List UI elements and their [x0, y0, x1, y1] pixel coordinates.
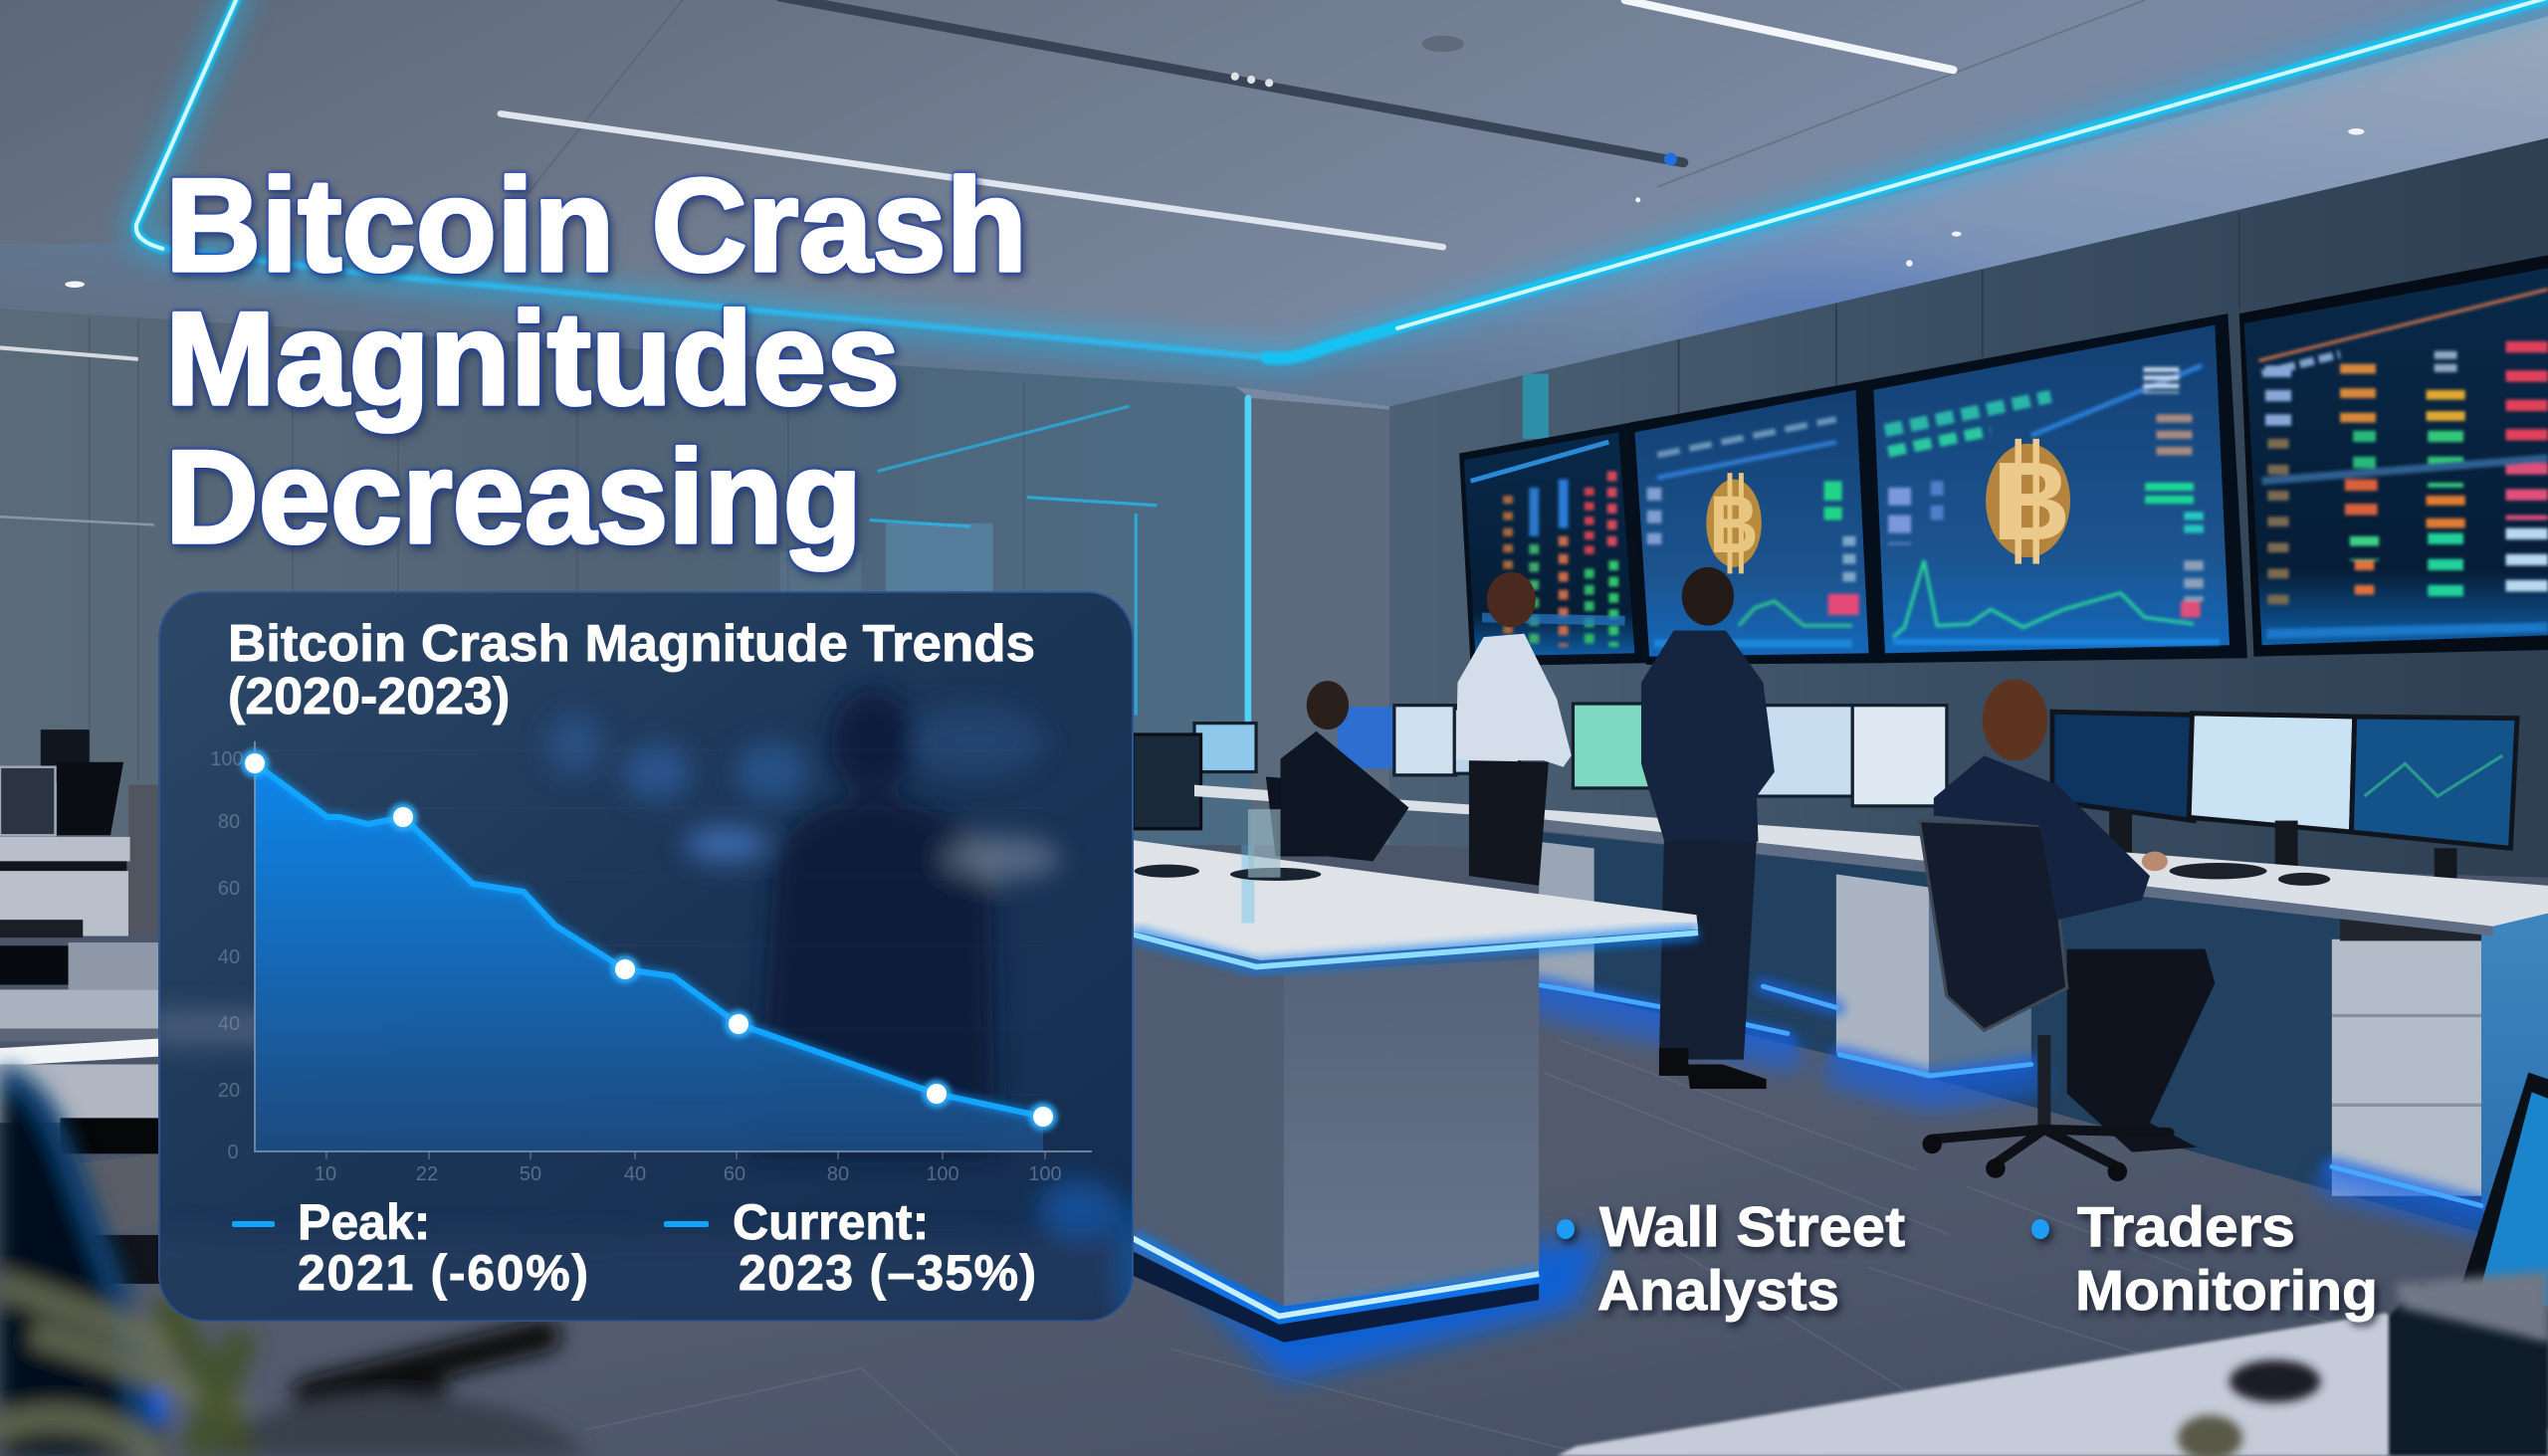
x axis labels: 50 — [520, 1163, 541, 1185]
ceiling light strips — [501, 0, 1953, 247]
left desks — [0, 729, 164, 1284]
panel: chart card — [129, 592, 1224, 1353]
y axis labels: 40 — [218, 946, 240, 968]
label: traders monitoring: Traders — [2077, 1195, 2295, 1259]
screen 1 — [1459, 423, 1646, 666]
data points — [241, 749, 1057, 1131]
area under line — [255, 763, 1043, 1151]
legend: peak — [232, 1194, 588, 1301]
x axis labels: 80 — [827, 1163, 849, 1185]
gridlines — [254, 750, 1045, 1095]
legend: current: Current: — [733, 1194, 929, 1250]
x axis labels: 60 — [724, 1163, 745, 1185]
trend line — [255, 763, 1043, 1117]
back desk row — [1133, 704, 2548, 1251]
bitcoin logo right: B — [1993, 439, 2070, 563]
y axis labels: 60 — [218, 878, 240, 900]
y axis labels: 80 — [218, 811, 240, 833]
legend: peak: 2021 (-60%) — [298, 1245, 588, 1301]
panel title — [228, 615, 1035, 726]
label: wall street analysts: Analysts — [1597, 1259, 1839, 1323]
axes — [255, 741, 1092, 1151]
panel title: (2020-2023) — [228, 668, 510, 726]
line chart — [210, 741, 1092, 1185]
glass wall left — [0, 309, 1251, 845]
title: Bitcoin Crash — [165, 152, 1027, 300]
x axis labels: 22 — [416, 1163, 438, 1185]
foreground right desk and monitors — [1557, 1073, 2548, 1456]
y axis labels — [210, 748, 244, 1163]
screen 3 — [1867, 313, 2247, 663]
right wall — [1251, 138, 2548, 878]
under-desk cabinets — [1539, 832, 2548, 1251]
label: traders monitoring: Monitoring — [2075, 1259, 2378, 1323]
legend: current — [664, 1194, 1036, 1301]
foreground left chair and plant — [0, 1073, 588, 1456]
monitors row — [1133, 704, 2517, 894]
y axis labels: 100 — [210, 748, 244, 770]
y axis labels: 20 — [218, 1080, 240, 1102]
overlay: title, panel, labels — [158, 169, 2383, 1332]
label: wall street analysts — [1557, 1195, 1905, 1323]
floor — [0, 975, 2548, 1456]
x axis labels: 40 — [624, 1163, 646, 1185]
neon ceiling line — [136, 0, 2548, 725]
title: Decreasing — [165, 424, 862, 571]
screen 4 — [2239, 255, 2548, 657]
y axis labels: 0 — [227, 1142, 239, 1163]
island floor glow — [1105, 1194, 1608, 1381]
title — [165, 152, 1027, 571]
x axis labels: 100 — [1028, 1163, 1062, 1185]
panel title: Bitcoin Crash Magnitude Trends — [228, 615, 1035, 673]
ceiling — [0, 0, 2548, 423]
screen 2 — [1630, 380, 1885, 665]
chair and seated trader — [1919, 680, 2215, 1181]
person navy suit — [1641, 567, 1775, 1089]
x axis labels: 100 — [926, 1163, 959, 1185]
x axis labels — [315, 1163, 1062, 1185]
person white shirt — [1456, 572, 1572, 886]
bitcoin logo left: B — [1710, 480, 1759, 570]
island neon upper — [1133, 933, 1698, 1320]
floor neon strips — [1539, 984, 2481, 1222]
wall screens — [1459, 255, 2548, 666]
legend: peak: Peak: — [298, 1194, 430, 1250]
person seated left — [1266, 681, 1409, 861]
blurred backdrop inside panel — [159, 679, 1133, 1321]
legend: current: 2023 (–35%) — [739, 1245, 1036, 1301]
people — [1266, 567, 2215, 1181]
title: Magnitudes — [165, 286, 900, 433]
x axis labels: 10 — [315, 1163, 336, 1185]
desk top — [1194, 785, 2548, 927]
y axis labels: 40 — [218, 1013, 240, 1035]
central island desk — [1105, 809, 1698, 1381]
reflected neon lines — [869, 406, 1157, 715]
spot lights — [65, 128, 2365, 341]
label: traders monitoring — [2031, 1195, 2378, 1323]
label: wall street analysts: Wall Street — [1599, 1195, 1905, 1259]
